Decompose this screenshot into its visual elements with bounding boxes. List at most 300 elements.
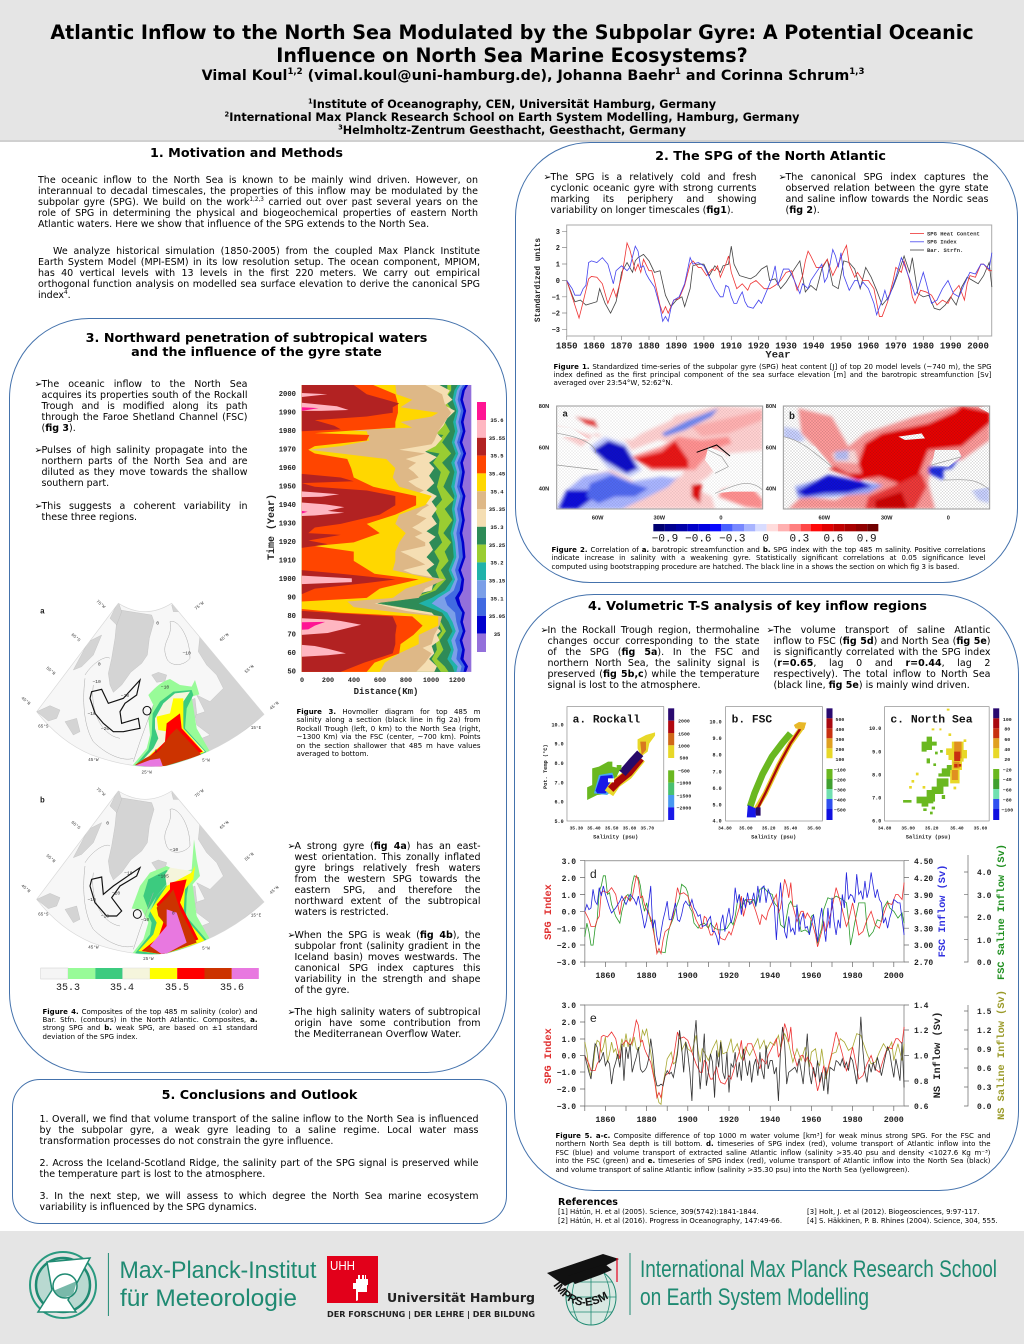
heading 2: 2. The SPG of the North Atlantic: [655, 148, 886, 164]
bullet: pulses of salinity: northern parts of the North Sea and are: [42, 456, 248, 467]
figure 4: composite maps: 75°W: [94, 599, 106, 610]
chart: figure 5d time series: 1960: [801, 970, 821, 980]
bullet: canonical index: The canonical SPG index captures the: [786, 172, 988, 183]
chart b FSC: 4.0: [712, 818, 721, 824]
caption: figure 1: Figure 1. Standardized time-series of the subpolar gyre (SPG) heat content [J] of top 20 model levels (~740 m), the SPG: [554, 362, 992, 370]
logo: IMPRS-ESM: [547, 1253, 997, 1326]
chart: figure 1 time series: 1880: [638, 341, 659, 351]
bullet: weak gyre: When the SPG is weak (fig 4b), the: [294, 930, 481, 941]
chart: figure 5d time series: 4.20: [914, 874, 933, 884]
chart b FSC: −300: [834, 787, 845, 793]
figure 4: composite maps: 45°W: [88, 757, 98, 762]
heading 3: and the influence of the gyre state: [131, 344, 382, 360]
text: methods: orthogonal function analysis on modelled sea surface elevation to derive the canonical SPG: [38, 278, 480, 290]
chart a rockall: 10.0: [551, 722, 563, 728]
caption: figure 4: Figure 4. Composites of the top 485 m salinity (color) and: [42, 1008, 258, 1016]
chart: figure 5d time series: 0.0: [561, 908, 576, 917]
title: Atlantic Inflow to the North Sea Modulated by the Subpolar Gyre: A Potential Oceanic: [50, 21, 974, 44]
chart c north sea: 35.60: [973, 825, 987, 831]
bullet: pulses of salinity: diluted as they move towards the shallow: [42, 467, 248, 478]
bullet: strong gyre: gyre brings relatively fresh waters: [294, 863, 480, 874]
bullet: volume transport: (r=0.65, lag 0 and r=0.44, lag 2: [774, 658, 990, 669]
bullet: pulses of salinity: [34, 445, 248, 489]
chart: figure 5d time series: FSC Inflow (Sv): [936, 864, 948, 957]
chart: figure 5d time series: d: [590, 866, 596, 880]
chart c north sea: 9.0: [872, 749, 881, 755]
figure 4: composite maps: 65°S: [69, 820, 81, 831]
figure 3: hovmoller diagram: 80: [287, 612, 296, 620]
chart: figure 5e time series: −3.0: [556, 1102, 576, 1112]
chart c north sea: 7.0: [872, 795, 881, 801]
chart c north sea: [869, 706, 1013, 840]
figure 2: correlation maps: 80N: [538, 403, 549, 409]
bullet: strong gyre: west orientation. This zonally inflated: [294, 852, 480, 863]
bullet: canonical index: and saline inflow towards the Nordic seas: [786, 194, 988, 205]
text: motivation: [38, 174, 478, 230]
map a: −10: [182, 650, 191, 656]
conclusion 1: by the subpolar gyre, a weak gyre leading to a saline regime. Local water mass: [40, 1125, 478, 1136]
chart: figure 1 time series: 3: [555, 228, 560, 236]
bullet: SPG description: [544, 172, 756, 216]
chart b FSC: b. FSC: [731, 714, 772, 726]
figure 3: hovmoller diagram: 200: [321, 676, 334, 684]
bullet: subtropical origin: The high salinity waters of subtropical: [294, 1007, 480, 1018]
title: [50, 21, 974, 67]
figure 3: hovmoller diagram: 1930: [278, 520, 296, 528]
figure 3: hovmoller diagram: 35.55: [488, 434, 505, 441]
figure 3: hovmoller diagram: 35.25: [488, 541, 505, 548]
colour bar figure 4: [40, 968, 258, 978]
affiliations: 2International Max Planck Research School on Earth System Modelling, Hamburg, Germany: [225, 110, 799, 124]
panel: northward penetration of subtropical waters: [9, 318, 507, 1073]
chart: figure 1 time series: 1900: [693, 341, 714, 351]
chart: figure 5d time series: [542, 844, 1008, 980]
map b: −10: [124, 870, 132, 876]
chart: figure 5e time series: NS Saline Inflow (Sv): [996, 990, 1008, 1119]
chart a rockall: −500: [678, 768, 689, 774]
bullet: volume transport: [766, 625, 990, 691]
chart: figure 1 time series: 1970: [885, 341, 906, 351]
chart a rockall: 35.70: [640, 825, 654, 831]
figure 2: correlation maps: 60N: [538, 445, 549, 451]
caption: figure 3: on the section shallower that 485 m have values: [296, 742, 480, 750]
figure 2: correlation maps: a: [562, 408, 568, 419]
figure 3: hovmoller diagram: 70: [287, 631, 296, 639]
heading 5: 5. Conclusions and Outlook: [162, 1088, 357, 1102]
chart b FSC: 100: [835, 757, 844, 762]
bullet: pulses of salinity: southern part.: [42, 478, 109, 489]
chart b FSC: 10.0: [709, 719, 721, 725]
caption: figure 2: indicate increase in salinity with a weakening gyre. Statistically significant correlations at 0.05 significance level: [552, 554, 986, 562]
chart b FSC: −400: [834, 797, 845, 803]
figure 3: hovmoller diagram: 90: [287, 594, 296, 602]
bullet: coherent variability: [34, 501, 248, 523]
footer band with logos: [0, 1231, 1024, 1344]
chart: figure 1 time series: [534, 224, 992, 361]
figure 4: composite maps: 55°N: [244, 664, 255, 674]
caption: figure 2: Figure 2. Correlation of a. barotropic streamfunction and b. SPG index with the top 485 m salinity. Positive correlations: [552, 546, 986, 554]
figure 3: hovmoller diagram: 1920: [278, 538, 296, 546]
chart: figure 5e time series: 1880: [636, 1114, 656, 1124]
chart b FSC: 300: [835, 737, 844, 742]
chart: figure 5e time series: 0.0: [561, 1052, 576, 1061]
header band: [0, 0, 1024, 142]
chart: figure 5e time series: NS Inflow (Sv): [932, 1011, 944, 1098]
chart a rockall: 1000: [678, 743, 689, 749]
panel: motivation and methods: [38, 146, 480, 300]
bullet: subtropical origin: origin have some contribution from: [294, 1018, 480, 1029]
caption: figure 5: FSC (blue) and volume transport of extracted saline Atlantic inflow (salinity >35.40 psu and density <1027.6 Kg m⁻³): [556, 1149, 990, 1157]
title: Influence on North Sea Marine Ecosystems?: [276, 44, 748, 67]
chart: figure 5e time series: 0.8: [914, 1078, 928, 1086]
figure 4: composite maps: 15°E: [250, 913, 261, 918]
bullet: strong gyre: A strong gyre (fig 4a) has an east-: [294, 841, 481, 852]
bullet: strong gyre: waters is restricted.: [294, 907, 389, 918]
chart c north sea: 34.80: [877, 825, 891, 831]
chart b FSC: 35.40: [783, 825, 797, 831]
chart: figure 5e time series: 1.2: [976, 1026, 991, 1036]
chart c north sea: 40: [1004, 747, 1010, 752]
chart b FSC: 8.0: [712, 752, 721, 758]
conclusion 3: variability is influenced by the SPG dynamics.: [40, 1202, 257, 1213]
logo: Universität Hamburg: UHH: [330, 1258, 355, 1273]
caption: figure 3: averaged to bottom.: [296, 750, 369, 758]
figure 3: hovmoller diagram: 600: [373, 676, 386, 684]
chart: figure 1 time series: 1990: [939, 341, 961, 351]
figure 3: hovmoller diagram: 400: [347, 676, 360, 684]
chart: figure 5e time series: SPG Index: [542, 1028, 554, 1083]
heading 3: [86, 330, 427, 360]
logo: Max Planck Institute: [30, 1252, 317, 1318]
chart b FSC: 5.0: [712, 802, 721, 808]
references: [558, 1197, 998, 1225]
figure 3: hovmoller diagram: 1990: [278, 409, 296, 417]
figure 4: composite maps: 55°N: [44, 666, 56, 676]
chart: figure 5e time series: 1860: [595, 1114, 615, 1124]
chart: figure 5e time series: 1920: [718, 1114, 739, 1124]
references: [3] Holt, J. et al (2012). Biogeosciences, 9:97-117.: [807, 1208, 979, 1216]
chart c north sea: 35.20: [924, 825, 938, 831]
chart a rockall: 2000: [678, 718, 689, 724]
figure 2: correlation maps: −0.9: [651, 533, 678, 545]
caption: figure 1: index defined as the first principal component of the sea surface elevation [m] and the barotropic streamfunction [Sv]: [554, 371, 992, 379]
chart: figure 5d time series: 1.0: [976, 936, 991, 946]
chart c north sea: −40: [1002, 777, 1011, 782]
chart: figure 5d time series: 0.0: [976, 958, 991, 968]
chart a rockall: Pot. Temp (°C): [542, 744, 548, 789]
logo: Max Planck Institute: für Meteorologie: [120, 1285, 297, 1312]
logo: Universität Hamburg: [327, 1256, 535, 1319]
bullet: canonical index: [778, 172, 988, 216]
chart: figure 5d time series: 3.60: [914, 908, 933, 917]
map a: 0: [156, 620, 159, 626]
figure 4: composite maps: 45°W: [88, 945, 98, 950]
figure 3: hovmoller diagram: 50: [287, 668, 296, 676]
map a: a: [39, 607, 44, 616]
figure 3: hovmoller diagram: 1900: [278, 576, 296, 584]
chart: figure 1 time series: 1910: [720, 341, 742, 351]
bullet: oceanic inflow: through the Faroe Shetland Channel (FSC): [42, 412, 248, 423]
bullet: rockall region: In the Rockall Trough region, thermohaline: [548, 625, 760, 636]
caption: figure 4: Bar. Stfn. (contours) in the North Atlantic. Composites, a.: [42, 1016, 258, 1024]
map a: [36, 601, 264, 768]
figure 2: correlation maps: 0.6: [823, 533, 843, 545]
panel: northward penetration of subtropical waters: ➢: [288, 930, 295, 941]
figure 2: correlation maps: [538, 403, 990, 545]
figure 3: hovmoller diagram: 800: [399, 676, 412, 684]
chart c north sea: c. North Sea: [890, 714, 972, 726]
chart a rockall: 35.60: [622, 825, 636, 831]
chart: figure 5e time series: 0.0: [976, 1102, 991, 1112]
figure 4: composite maps: 75°W: [194, 788, 205, 799]
chart: figure 1 time series: SPG Heat Content: [926, 230, 979, 237]
figure 4: composite maps: 65°N: [219, 820, 230, 830]
caption: figure 5: northern North Sea depth is till bottom. d. timeseries of SPG index (red), volume transport of Atlantic inflow into the: [556, 1140, 991, 1148]
chart c north sea: −60: [1002, 787, 1011, 793]
chart: figure 1 time series: −3: [551, 326, 560, 334]
chart: figure 1 time series: 1930: [775, 341, 796, 351]
bullet: weak gyre: subpolar front (salinity gradient in the: [294, 941, 480, 952]
panel: northward penetration of subtropical waters: ➢: [288, 1007, 295, 1018]
figure 4: composite maps: [19, 599, 280, 994]
figure 3: hovmoller diagram: 1960: [278, 464, 296, 472]
chart: figure 5e time series: 1960: [801, 1114, 821, 1124]
map a: −10: [92, 678, 101, 684]
caption: figure 1: averaged over 23:54°W, 52:62°N.: [554, 379, 673, 387]
caption: figure 3: Figure 3. Hovmoller diagram for top 485 m: [296, 708, 480, 716]
figure 2: correlation maps: 0: [719, 515, 722, 521]
bullet: weak gyre: Iceland basin) moves westwards. The: [294, 952, 480, 963]
chart c north sea: 6.0: [872, 818, 881, 824]
bullet: oceanic inflow: The oceanic inflow to the North Sea: [42, 379, 248, 390]
chart b FSC: 35.20: [761, 825, 775, 831]
figure 4: composite maps: 65°N: [219, 632, 230, 643]
chart: figure 1 time series: 1980: [912, 341, 934, 351]
conclusion 1: [40, 1114, 478, 1147]
chart: figure 5e time series: 0.9: [976, 1046, 991, 1054]
figure 3: hovmoller diagram: 35.2: [490, 559, 503, 566]
figure 3: hovmoller diagram: 35.45: [488, 470, 505, 477]
chart: figure 1 time series: 1860: [583, 341, 604, 351]
bullet: rockall region: [540, 625, 760, 691]
chart b FSC: −100: [834, 767, 845, 773]
chart: figure 5e time series: 1.4: [914, 1002, 928, 1010]
chart a rockall: 7.0: [554, 780, 563, 786]
text: methods: index4.: [38, 289, 71, 300]
map b: [783, 405, 989, 508]
references: [1] Hátún, H. et al (2005). Science, 309(5742):1841-1844.: [558, 1208, 759, 1216]
chart: figure 5e time series: 1.2: [914, 1026, 928, 1036]
chart: figure 5e time series: 1940: [760, 1114, 780, 1124]
chart c north sea: 35.00: [901, 825, 915, 831]
text: methods: [38, 246, 480, 300]
heading 3: 3. Northward penetration of subtropical waters: [86, 330, 427, 346]
chart b FSC: 200: [835, 747, 844, 752]
heading 4: 4. Volumetric T-S analysis of key inflow regions: [588, 599, 927, 614]
map b: 0: [171, 910, 174, 916]
chart: figure 5e time series: 2.0: [561, 1018, 576, 1028]
panel: the SPG of the North Atlantic: ➢: [778, 172, 786, 183]
figure 4: composite maps: 55°N: [244, 851, 255, 862]
caption: figure 2: [552, 546, 986, 571]
logo: Max Planck Institute: Max-Planck-Institut: [120, 1257, 317, 1284]
chart: figure 5d time series: 1.0: [561, 892, 576, 900]
chart: figure 5d time series: 3.0: [976, 892, 991, 900]
chart: figure 1 time series: 2000: [967, 341, 988, 351]
panel: volumetric T-S analysis: ➢: [540, 625, 548, 636]
caption: figure 1: [554, 362, 992, 387]
logo: Universität Hamburg: DER FORSCHUNG | DER LEHRE | DER BILDUNG: [327, 1310, 535, 1319]
bullet: rockall region: signal is lost to the atmosphere.: [548, 680, 701, 691]
conclusion 2: [40, 1158, 478, 1180]
text: motivation: role of SPG in determining the physical and biogeochemical properties of eastern North: [38, 208, 478, 218]
chart: figure 1 time series: 1: [555, 261, 560, 269]
map b: −10: [87, 896, 96, 902]
chart b FSC: 500: [835, 717, 844, 722]
chart a rockall: 35.30: [569, 825, 583, 831]
panel: northward penetration of subtropical waters: ➢: [34, 379, 42, 390]
chart a rockall: 500: [679, 755, 688, 761]
chart: figure 1 time series: 1960: [857, 341, 879, 351]
bullet: rockall region: northern North Sea, the salinity signal is: [548, 658, 760, 669]
bullet: coherent variability: This suggests a coherent variability in: [42, 501, 248, 512]
figure 3: hovmoller diagram: 35.6: [490, 416, 503, 424]
map a: 0: [154, 748, 157, 754]
figure 4: composite maps: 55°N: [44, 853, 56, 864]
chart a rockall: −2000: [676, 805, 691, 811]
chart: figure 1 time series: 1890: [665, 341, 687, 351]
figure 2: correlation maps: b: [788, 410, 794, 421]
conclusion 1: transformation processes do not constrain the gyre influence.: [40, 1136, 333, 1147]
chart: figure 1 time series: Standardized units: [534, 237, 542, 322]
chart: figure 5d time series: 1860: [595, 970, 615, 980]
map a: −10: [160, 684, 169, 690]
conclusion 2: 2. Across the Iceland-Scotland Ridge, the salinity part of the SPG signal is preserved while: [40, 1158, 478, 1169]
chart: figure 5d time series: 2.70: [914, 958, 933, 968]
bullet: SPG description: variability on longer timescales (fig1).: [550, 205, 734, 216]
caption: figure 2: computed using bootstrapping procedure are hatched. The black line in a shows the section on which fig 3 is based.: [552, 563, 959, 571]
panel: northward penetration of subtropical waters: ➢: [288, 841, 295, 852]
figure 4: composite maps: 5°W: [202, 758, 210, 763]
bullet: weak gyre: [288, 930, 481, 996]
chart: figure 5e time series: 0.6: [914, 1102, 928, 1112]
references: References: [558, 1197, 618, 1208]
figure 2: correlation maps: −0.3: [719, 533, 745, 545]
chart: figure 5e time series: e: [590, 1010, 596, 1024]
text: motivation: interannual to decadal timescales, the properties of this inflow may be modulated by the: [38, 186, 478, 196]
chart: figure 5d time series: 3.30: [914, 925, 933, 934]
chart b FSC: −200: [834, 777, 845, 783]
caption: figure 3: [296, 708, 480, 758]
chart: figure 5e time series: 0.3: [976, 1084, 991, 1092]
figure 4: composite maps: 45°N: [269, 700, 280, 711]
figure 3: hovmoller diagram: [266, 385, 505, 696]
bullet: weak gyre: variability in the strength and shape: [294, 974, 480, 985]
figure 3: hovmoller diagram: 1970: [278, 446, 296, 454]
map b: −105: [157, 873, 169, 879]
chart b FSC: [709, 706, 845, 840]
chart: figure 5d time series: 3.0: [561, 858, 576, 866]
affiliations: 1Institute of Oceanography, CEN, Universität Hamburg, Germany: [308, 97, 716, 111]
caption: figure 5: Figure 5. a-c. Composite difference of top 1000 m water volume [km³] for weak minus strong SPG. For the FSC and: [556, 1132, 991, 1140]
figure 4: composite maps: 45°N: [19, 883, 31, 894]
figure 2: correlation maps: 0.3: [789, 533, 809, 545]
figure 4: composite maps: 75°W: [194, 600, 205, 611]
chart: figure 5e time series: −1.0: [556, 1068, 576, 1078]
bullet: strong gyre: northward extent of the subtropical: [294, 896, 480, 907]
figure 3: hovmoller diagram: 35.15: [488, 577, 505, 584]
chart c north sea: 10.0: [869, 726, 881, 731]
figure 5a-c: T-S composites: [542, 706, 1013, 840]
bullet: weak gyre: of the gyre.: [294, 985, 350, 996]
chart c north sea: 100: [1002, 717, 1011, 722]
bullet: volume transport: respectively). The total inflow to North Sea: [774, 669, 990, 680]
bullet: coherent variability: these three regions.: [42, 512, 137, 523]
bullet: pulses of salinity: Pulses of high salinity propagate into the: [42, 445, 248, 456]
chart c north sea: 80: [1004, 726, 1010, 732]
figure 3: hovmoller diagram: 1950: [278, 483, 296, 491]
bullet: SPG description: The SPG is a relatively cold and fresh: [550, 172, 756, 183]
figure 3: hovmoller diagram: 35.3: [490, 524, 504, 530]
map b: −10: [169, 846, 178, 852]
chart: figure 5d time series: 1940: [760, 970, 780, 980]
chart a rockall: 5.0: [554, 819, 563, 824]
figure 3: hovmoller diagram: 60: [287, 650, 296, 658]
chart: figure 1 time series: Year: [765, 349, 790, 361]
figure 3: hovmoller diagram: Distance(Km): [353, 686, 418, 696]
figure 4: composite maps: 25°W: [143, 956, 153, 961]
chart a rockall: −1500: [676, 793, 691, 799]
figure 4: composite maps: 35.4: [109, 982, 134, 994]
chart: figure 1 time series: 1950: [830, 341, 851, 351]
figure 4: composite maps: 45°N: [269, 885, 280, 895]
chart a rockall: 9.0: [554, 741, 563, 747]
colour bar figure 2: [653, 523, 878, 531]
chart b FSC: −500: [834, 807, 845, 813]
chart: figure 1 time series: 1920: [747, 341, 769, 351]
bullet: oceanic inflow: acquires its properties south of the Rockall: [42, 390, 248, 401]
map b: b: [39, 796, 44, 805]
caption: figure 5: [556, 1132, 991, 1174]
figure 3: hovmoller diagram: 35: [493, 630, 500, 638]
caption: figure 4: strong SPG and b. weak SPG, are based on ±1 standard: [42, 1024, 258, 1032]
chart: figure 5d time series: 2000: [883, 970, 903, 980]
chart a rockall: a. Rockall: [572, 714, 640, 726]
figure 2: correlation maps: 80N: [765, 403, 776, 409]
chart: figure 5e time series: 0.6: [976, 1064, 991, 1074]
chart c north sea: 35.40: [950, 825, 963, 831]
caption: figure 3: salinity along a section (black line in fig 2a) from: [296, 716, 480, 724]
panel: northward penetration of subtropical waters: ➢: [34, 445, 42, 456]
bullet: volume transport: inflow to FSC (fig 5d) and North Sea (fig 5e): [774, 636, 990, 647]
map a: [556, 405, 762, 508]
chart a rockall: 6.0: [554, 799, 563, 805]
conclusion 3: [40, 1191, 478, 1213]
chart b FSC: 35.00: [739, 825, 752, 831]
figure 3: hovmoller diagram: 1200: [448, 676, 465, 684]
text: motivation: subpolar gyre (SPG). We build on the work1,2,3 carried out over past several years on the: [38, 196, 478, 208]
map b: −20: [111, 890, 120, 896]
figure 2: correlation maps: 30W: [653, 515, 665, 521]
chart c north sea: 20: [1004, 757, 1010, 762]
colour bar figure 3: [476, 402, 486, 652]
chart c north sea: −80: [1002, 797, 1011, 803]
figure 3: hovmoller diagram: 1910: [278, 557, 296, 565]
chart: figure 5e time series: [542, 990, 1008, 1124]
bullet: weak gyre: canonical SPG index captures this: [294, 963, 480, 974]
figure 4: composite maps: 65°S: [38, 912, 48, 917]
chart c north sea: 8.0: [872, 772, 881, 778]
